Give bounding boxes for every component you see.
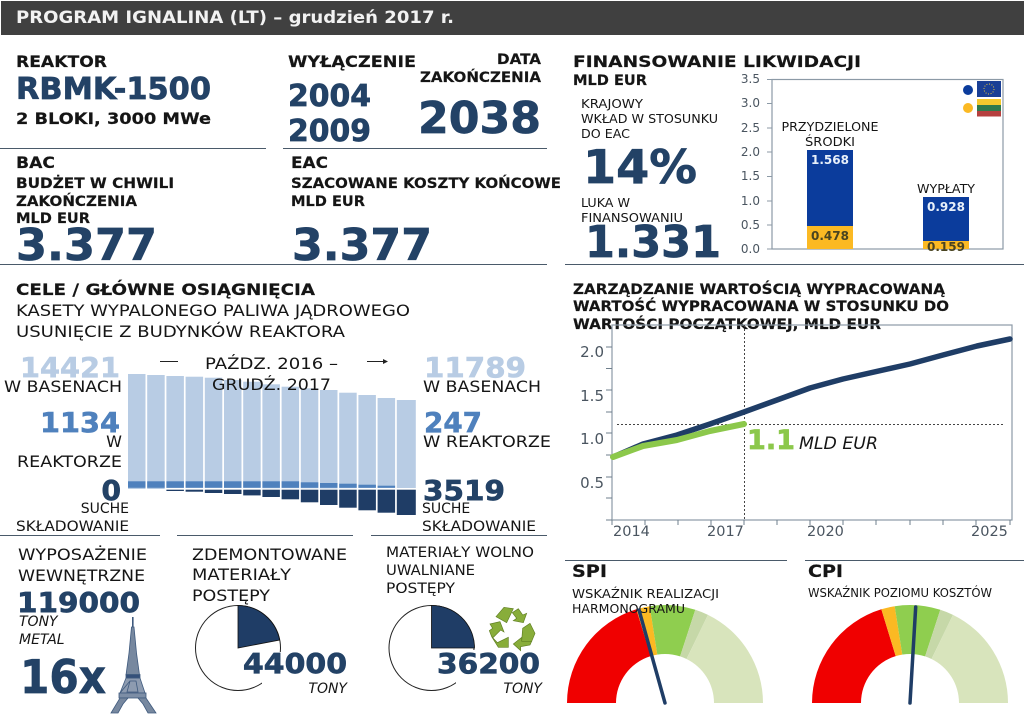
heading: objectives: USUNIĘCIE Z BUDYNKÓW REAKTORA <box>16 322 345 341</box>
labels: end values: 11789 <box>424 351 526 384</box>
panel: reactor: REAKTOR <box>16 52 107 71</box>
labels: start values: 0 <box>102 474 121 507</box>
labels: end values: 247 <box>424 406 482 439</box>
bar chart: funding: 3.5 <box>741 72 760 86</box>
panel: free-release materials: 36200 <box>437 647 540 680</box>
bar chart: funding: 0.0 <box>741 242 760 256</box>
heading: objectives: KASETY WYPALONEGO PALIWA JĄDROWEGO <box>16 301 410 320</box>
panel: internal equipment: WEWNĘTRZNE <box>18 566 145 585</box>
labels: end values: W REAKTORZE <box>423 432 551 451</box>
line chart: earned value: 0.5 <box>580 474 604 492</box>
panel: reactor: 2 BLOKI, 3000 MWe <box>16 109 211 128</box>
panel: BAC: 3.377 <box>16 220 157 271</box>
panel: BAC: MLD EUR <box>16 211 90 227</box>
panel: BAC: BAC <box>16 153 55 172</box>
panel: funding <box>573 52 861 268</box>
bar chart: funding: 2.5 <box>741 121 760 135</box>
period label with arrow: GRUDŹ. 2017 <box>212 375 331 394</box>
bar chart: funding: 1.0 <box>741 194 760 208</box>
panel: free-release materials: TONY <box>503 681 543 697</box>
panel: EAC <box>291 153 561 271</box>
bar chart: funding: 0.159 <box>927 240 965 254</box>
panel: completion date: 2038 <box>418 93 541 144</box>
panel: internal equipment: 16x <box>20 650 106 704</box>
line chart: earned value: 1.5 <box>580 387 604 405</box>
panel: shutdown dates: 2004 <box>288 79 371 114</box>
labels: end values: SUCHE <box>422 501 470 517</box>
labels: start values: SUCHE <box>81 501 129 517</box>
heading: objectives <box>16 280 410 341</box>
panel: funding: FINANSOWANIU <box>581 211 683 225</box>
panel: completion date: ZAKOŃCZENIA <box>420 68 541 86</box>
panel: EAC: MLD EUR <box>291 194 365 210</box>
gauge: SPI: WSKAŹNIK REALIZACJI <box>572 586 719 601</box>
panel: funding: DO EAC <box>581 127 630 141</box>
bar chart: funding: 1.568 <box>811 153 849 167</box>
bar chart: funding: 0.5 <box>741 218 760 232</box>
labels: start values: W <box>106 432 122 451</box>
pie chart: dismantled progress <box>196 606 292 697</box>
panel: internal equipment: WYPOSAŻENIE <box>18 545 147 564</box>
panel: BAC: BUDŻET W CHWILI <box>16 175 174 192</box>
icon: recycling <box>489 607 535 651</box>
line chart: earned value: 2025 <box>971 524 1008 540</box>
panel: completion date: DATA <box>497 52 541 68</box>
panel: dismantled materials: ZDEMONTOWANE <box>192 545 347 564</box>
panel: funding: MLD EUR <box>573 73 647 89</box>
line chart: earned value <box>580 325 1012 540</box>
legend: EU and Lithuania <box>963 81 1001 116</box>
labels: start values: REAKTORZE <box>17 452 122 471</box>
panel: internal equipment <box>17 545 147 704</box>
heading: objectives: CELE / GŁÓWNE OSIĄGNIĘCIA <box>16 280 316 299</box>
bar chart: funding: WYPŁATY <box>917 182 976 196</box>
title bar <box>1 1 1024 35</box>
panel: free-release materials: POSTĘPY <box>386 581 455 597</box>
stacked bars: fuel assemblies <box>128 374 416 515</box>
panel: free-release materials: MATERIAŁY WOLNO <box>386 545 534 561</box>
bar chart: funding: 0.478 <box>811 229 849 243</box>
panel: EAC: EAC <box>291 153 328 172</box>
panel: internal equipment: TONY <box>19 614 59 630</box>
panel: dismantled materials: MATERIAŁY <box>192 565 291 584</box>
bar chart: funding: 0.928 <box>927 200 965 214</box>
gauge: SPI: SPI <box>572 562 607 581</box>
panel: funding: LUKA W <box>581 196 630 210</box>
line chart: earned value: 2014 <box>613 524 650 540</box>
line chart: earned value: 1.0 <box>580 430 604 448</box>
panel: dismantled materials <box>192 545 348 697</box>
heading: earned value: ZARZĄDZANIE WARTOŚCIĄ WYPRACOWANĄ <box>573 280 946 298</box>
panel: BAC <box>16 153 174 271</box>
labels: end values: W BASENACH <box>423 377 541 396</box>
gauge: CPI <box>808 562 1008 703</box>
labels: start values <box>4 351 129 535</box>
panel: reactor: RBMK-1500 <box>16 72 211 107</box>
bar chart: funding: ŚRODKI <box>805 134 855 149</box>
panel: shutdown dates: 2009 <box>288 114 371 149</box>
gauge: SPI <box>567 562 763 703</box>
labels: start values: SKŁADOWANIE <box>16 519 129 535</box>
panel: completion date <box>418 52 541 144</box>
panel: shutdown dates: WYŁĄCZENIE <box>288 52 416 71</box>
heading: earned value: WARTOŚCI POCZĄTKOWEJ, MLD EUR <box>573 315 881 333</box>
panel: dismantled materials: POSTĘPY <box>192 586 270 605</box>
period label with arrow <box>160 354 388 394</box>
panel: free-release materials <box>386 545 543 697</box>
panel: EAC: 3.377 <box>292 220 432 271</box>
panel: dismantled materials: 44000 <box>243 647 347 680</box>
panel: EAC: SZACOWANE KOSZTY KOŃCOWE <box>291 174 561 192</box>
icon: Eiffel tower <box>111 617 156 713</box>
line chart: earned value: MLD EUR <box>799 434 878 453</box>
line chart: earned value: 1.1 <box>747 425 795 456</box>
panel: BAC: ZAKOŃCZENIA <box>16 192 137 210</box>
pie chart: free-release progress <box>389 605 486 695</box>
panel: internal equipment: 119000 <box>17 586 140 619</box>
labels: end values: 3519 <box>423 474 505 507</box>
panel: shutdown dates <box>288 52 416 149</box>
bar chart: funding <box>741 72 1003 256</box>
bar chart: funding: 2.0 <box>741 145 760 159</box>
line chart: earned value: 2.0 <box>580 343 604 361</box>
panel: funding: KRAJOWY <box>581 97 644 111</box>
title bar: PROGRAM IGNALINA (LT) – grudzień 2017 r. <box>16 8 454 28</box>
panel: dismantled materials: TONY <box>308 681 348 697</box>
labels: end values <box>422 351 551 535</box>
panel: funding: FINANSOWANIE LIKWIDACJI <box>573 52 861 71</box>
labels: start values: W BASENACH <box>4 377 122 396</box>
panel: funding: WKŁAD W STOSUNKU <box>581 112 718 126</box>
heading: earned value <box>573 280 949 333</box>
line chart: earned value: 2017 <box>707 524 744 540</box>
line chart: earned value: 2020 <box>807 524 844 540</box>
panel: funding: 14% <box>583 140 697 194</box>
gauge: SPI: HARMONOGRAMU <box>572 602 685 616</box>
panel: funding: 1.331 <box>585 217 721 268</box>
panel: reactor <box>16 52 211 128</box>
gauge: CPI: WSKAŹNIK POZIOMU KOSZTÓW <box>808 585 992 600</box>
period label with arrow: PAŹDZ. 2016 – <box>205 354 338 373</box>
labels: end values: SKŁADOWANIE <box>422 519 536 535</box>
bar chart: funding: PRZYDZIELONE <box>782 120 878 134</box>
bar chart: funding: 1.5 <box>741 169 760 183</box>
gauge: CPI: CPI <box>808 562 843 581</box>
panel: internal equipment: METAL <box>19 632 65 648</box>
labels: start values: 1134 <box>40 406 120 439</box>
heading: earned value: WARTOŚĆ WYPRACOWANA W STOSUNKU DO <box>573 297 949 315</box>
bar chart: funding: 3.0 <box>741 96 760 110</box>
panel: free-release materials: UWALNIANE <box>386 563 475 579</box>
labels: start values: 14421 <box>20 351 120 384</box>
